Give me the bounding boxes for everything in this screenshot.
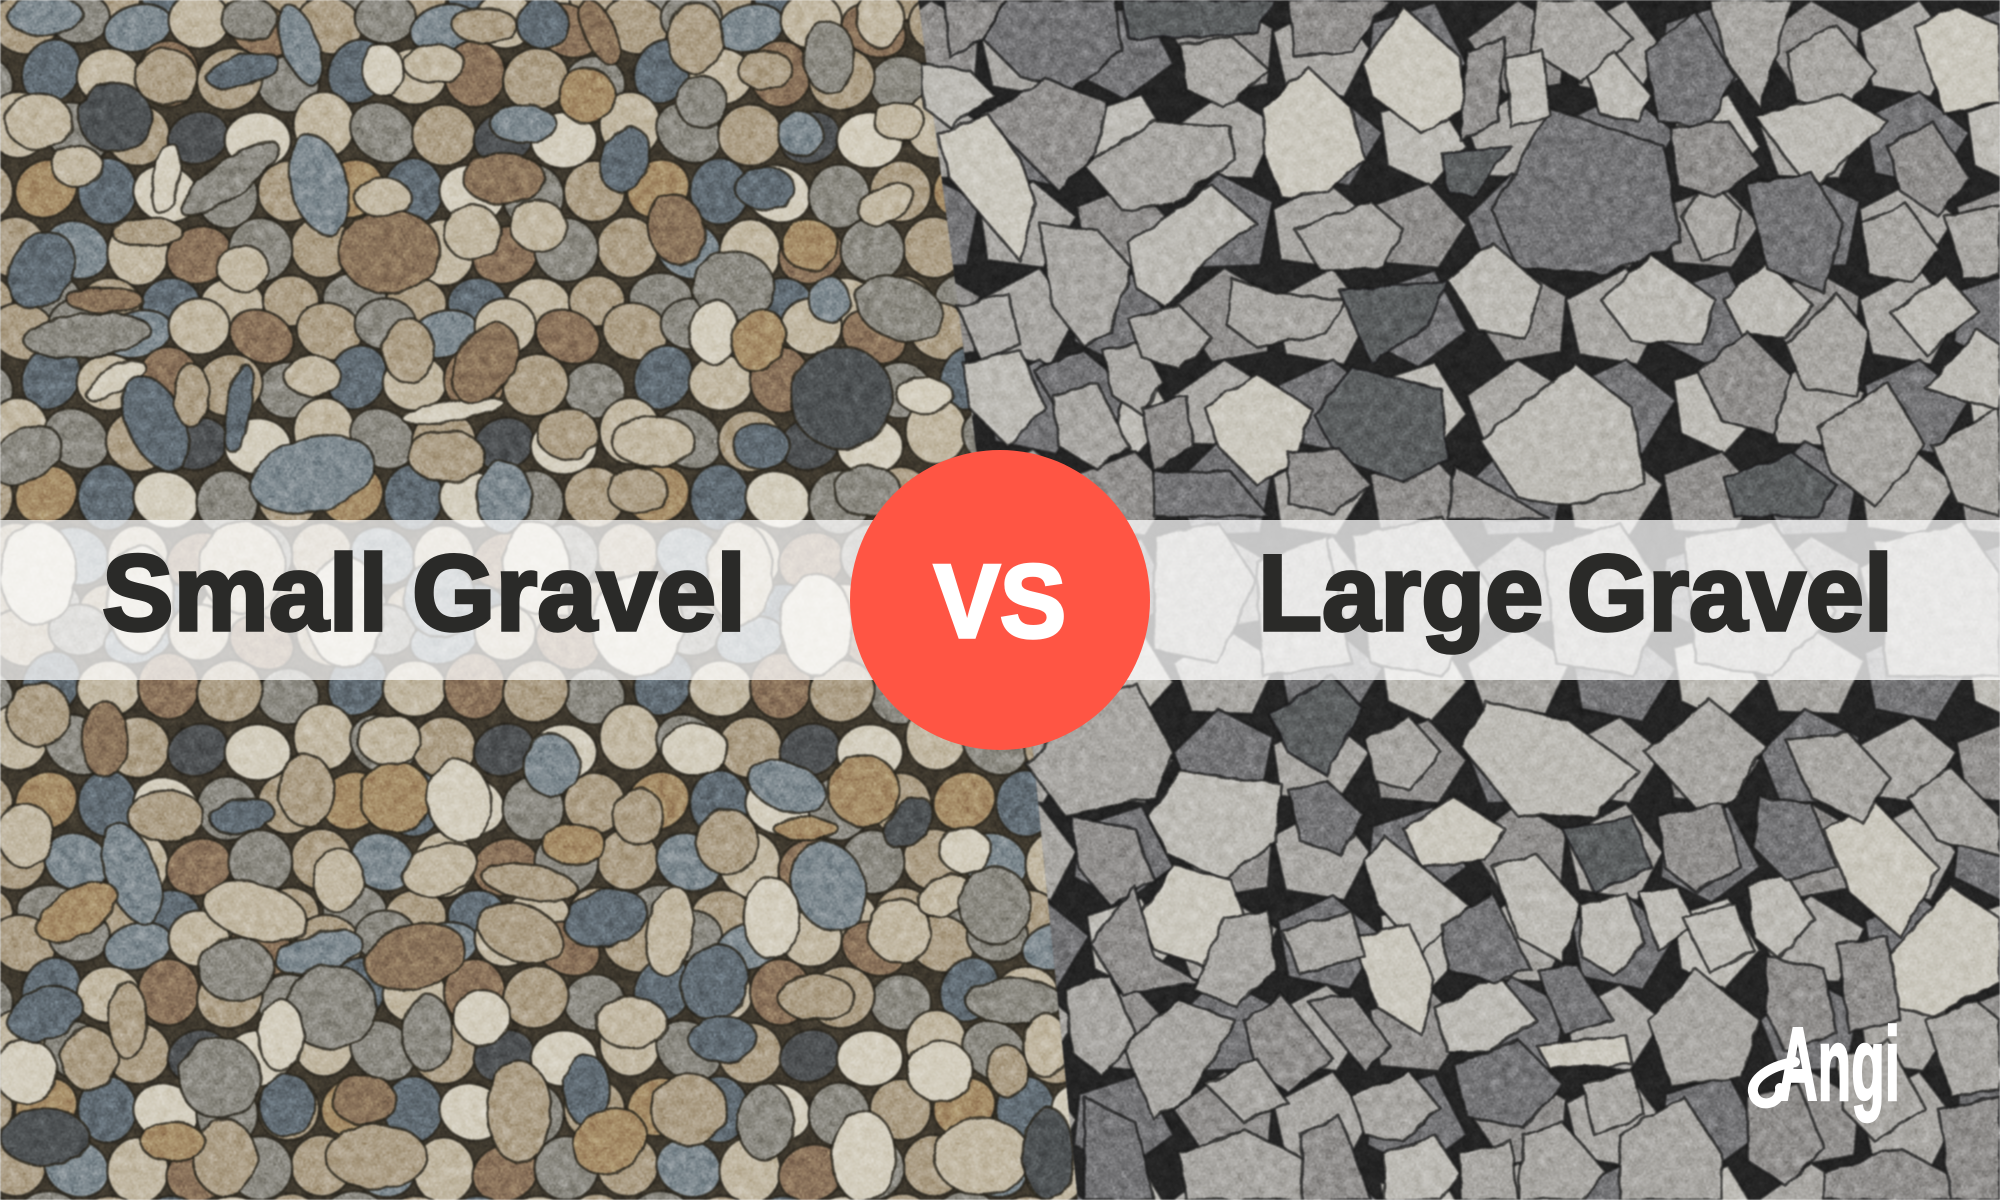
label band — [0, 520, 2000, 680]
vs circle: VS — [934, 544, 1066, 660]
heading: small gravel: Small Gravel — [102, 532, 746, 653]
panel: small gravel — [0, 0, 1148, 1200]
vs circle — [850, 450, 1150, 750]
panel: large gravel — [918, 0, 2000, 1200]
heading: large gravel: Large Gravel — [1258, 532, 1893, 653]
logo: Angi — [1753, 1007, 1900, 1123]
